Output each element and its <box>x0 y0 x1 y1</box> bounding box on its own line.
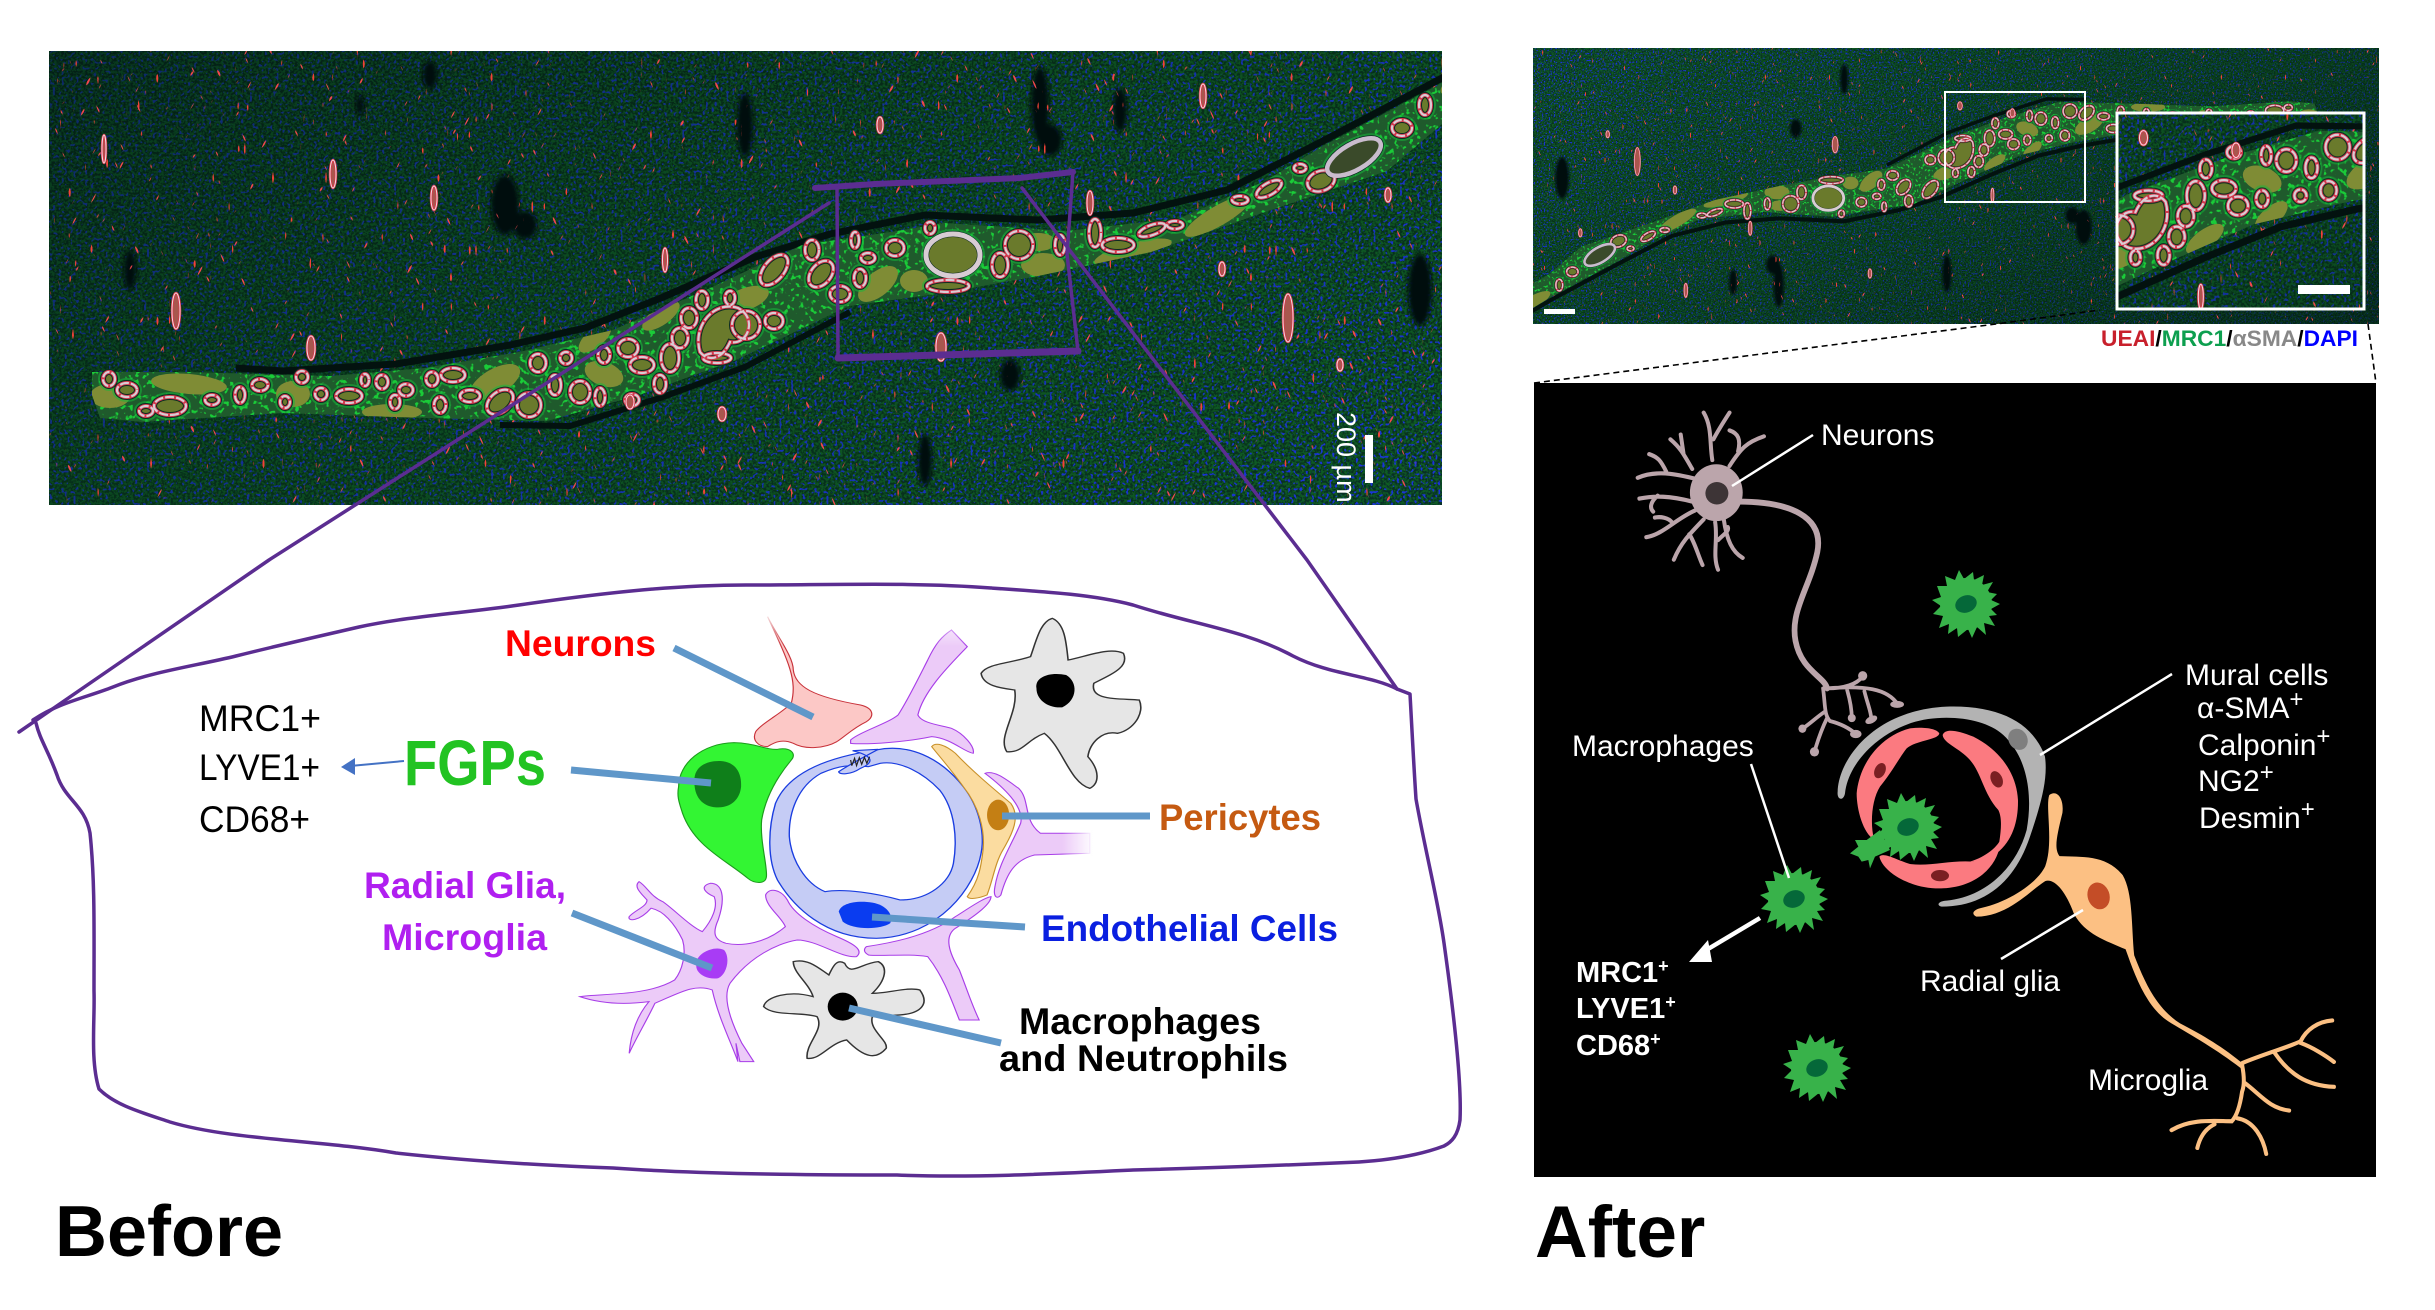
icon: radial glia cell <box>580 882 859 1062</box>
inset: magnified tissue <box>1672 112 2366 1146</box>
icon: macrophage middle <box>1760 865 1828 933</box>
mural cell <box>1838 707 2046 907</box>
icon: endothelial ring <box>770 748 982 938</box>
label: Mural cells markers: Mural cells <box>2185 659 2328 692</box>
scale bar 200 um: 200 µm <box>1331 412 1361 503</box>
icon: macrophage top <box>981 618 1141 788</box>
white selection box <box>1945 92 2085 202</box>
icon: macrophage inside vessel <box>1874 793 1942 861</box>
text: FGP markers: CD68+ <box>199 799 310 840</box>
scale bar <box>1544 309 1575 314</box>
macrophage protrusion <box>1850 830 1890 868</box>
heading: After: After <box>1535 1192 1705 1273</box>
dashed zoom connectors <box>1534 310 2376 383</box>
label: Microglia: Microglia <box>2088 1064 2208 1097</box>
annotation: hand-drawn purple selection box <box>815 172 1078 358</box>
label: Neurons: Neurons <box>1821 419 1934 452</box>
icon: radial glia <box>1973 793 2334 1154</box>
label: Mural cells markers: NG2 <box>2198 765 2260 798</box>
label: Mural cells markers: + <box>2316 723 2330 750</box>
endothelial cell left <box>1857 728 1939 839</box>
icon: pericyte <box>932 744 1015 898</box>
heading: Before: Before <box>55 1192 283 1272</box>
legend: stain colours: UEAI/MRC1/αSMA/DAPI <box>2101 326 2358 351</box>
leader lines: after diagram <box>1732 435 2172 959</box>
icon: macrophage bottom <box>764 961 924 1058</box>
text: macrophage markers: LYVE1 <box>1576 993 1665 1025</box>
endothelial cell bottom <box>1879 845 2000 888</box>
text: macrophage markers: + <box>1650 1029 1661 1049</box>
text: FGP markers: MRC1+ <box>199 698 321 739</box>
panel: after black schematic <box>1534 383 2376 1177</box>
label: Mural cells markers: Desmin <box>2199 802 2301 835</box>
arrow: FGPs to markers <box>341 758 404 775</box>
icon: macrophage top <box>1932 570 2000 638</box>
icon: vessel with mural and endothelial cells <box>1838 707 2046 907</box>
endothelial cell right <box>1943 731 2018 862</box>
leader lines: before diagram <box>571 648 1150 1043</box>
label: Radial Glia, Microglia: Microglia <box>382 917 547 958</box>
label: Radial Glia, Microglia: Radial Glia, <box>364 865 566 906</box>
label: Mural cells markers <box>2185 659 2330 835</box>
icon: FGP cell <box>678 743 793 882</box>
label: Macrophages and Neutrophils: and Neutrophils <box>999 1038 1288 1079</box>
panel: before microscopy image <box>26 51 1442 1107</box>
text: macrophage markers: + <box>1658 956 1669 976</box>
icon: macrophage bottom <box>1783 1034 1851 1102</box>
text: FGP markers: LYVE1+ <box>199 747 320 788</box>
text: macrophage markers: CD68 <box>1576 1030 1650 1062</box>
label: Mural cells markers: + <box>2260 759 2274 786</box>
icon: glia process lower right <box>864 897 991 1020</box>
icon: glia nucleus <box>696 948 727 979</box>
text: macrophage markers <box>1576 956 1676 1062</box>
label: Radial glia: Radial glia <box>1920 965 2060 998</box>
label: Mural cells markers: Calponin <box>2198 729 2316 762</box>
label: Macrophages and Neutrophils <box>999 1001 1288 1079</box>
label: Mural cells markers: + <box>2301 796 2315 823</box>
label: Radial Glia, Microglia <box>364 865 566 958</box>
label: Mural cells markers: + <box>2289 686 2303 713</box>
text: macrophage markers: MRC1 <box>1576 957 1658 989</box>
text: macrophage markers: + <box>1665 992 1676 1012</box>
icon: neuron <box>1638 413 1904 757</box>
label: FGPs: FGPs <box>404 727 546 799</box>
icon: glia process right <box>985 773 1090 897</box>
label: Macrophages: Macrophages <box>1572 730 1754 763</box>
label: Mural cells markers: α-SMA <box>2197 692 2289 725</box>
icon: glia process top <box>851 630 973 753</box>
label: Macrophages and Neutrophils: Macrophages <box>1019 1001 1261 1042</box>
label: Endothelial Cells: Endothelial Cells <box>1041 908 1338 949</box>
icon: neuron endfoot <box>754 617 872 748</box>
panel: before cell diagram <box>580 610 1141 1062</box>
label: Pericytes: Pericytes <box>1159 797 1321 838</box>
annotation: purple zoom connector lines and outline <box>19 188 1460 1176</box>
arrow: macrophage to markers <box>1689 918 1760 962</box>
text: FGP markers <box>199 698 321 840</box>
label: Neurons: Neurons <box>505 623 656 664</box>
panel: after microscopy image <box>1533 48 2379 324</box>
